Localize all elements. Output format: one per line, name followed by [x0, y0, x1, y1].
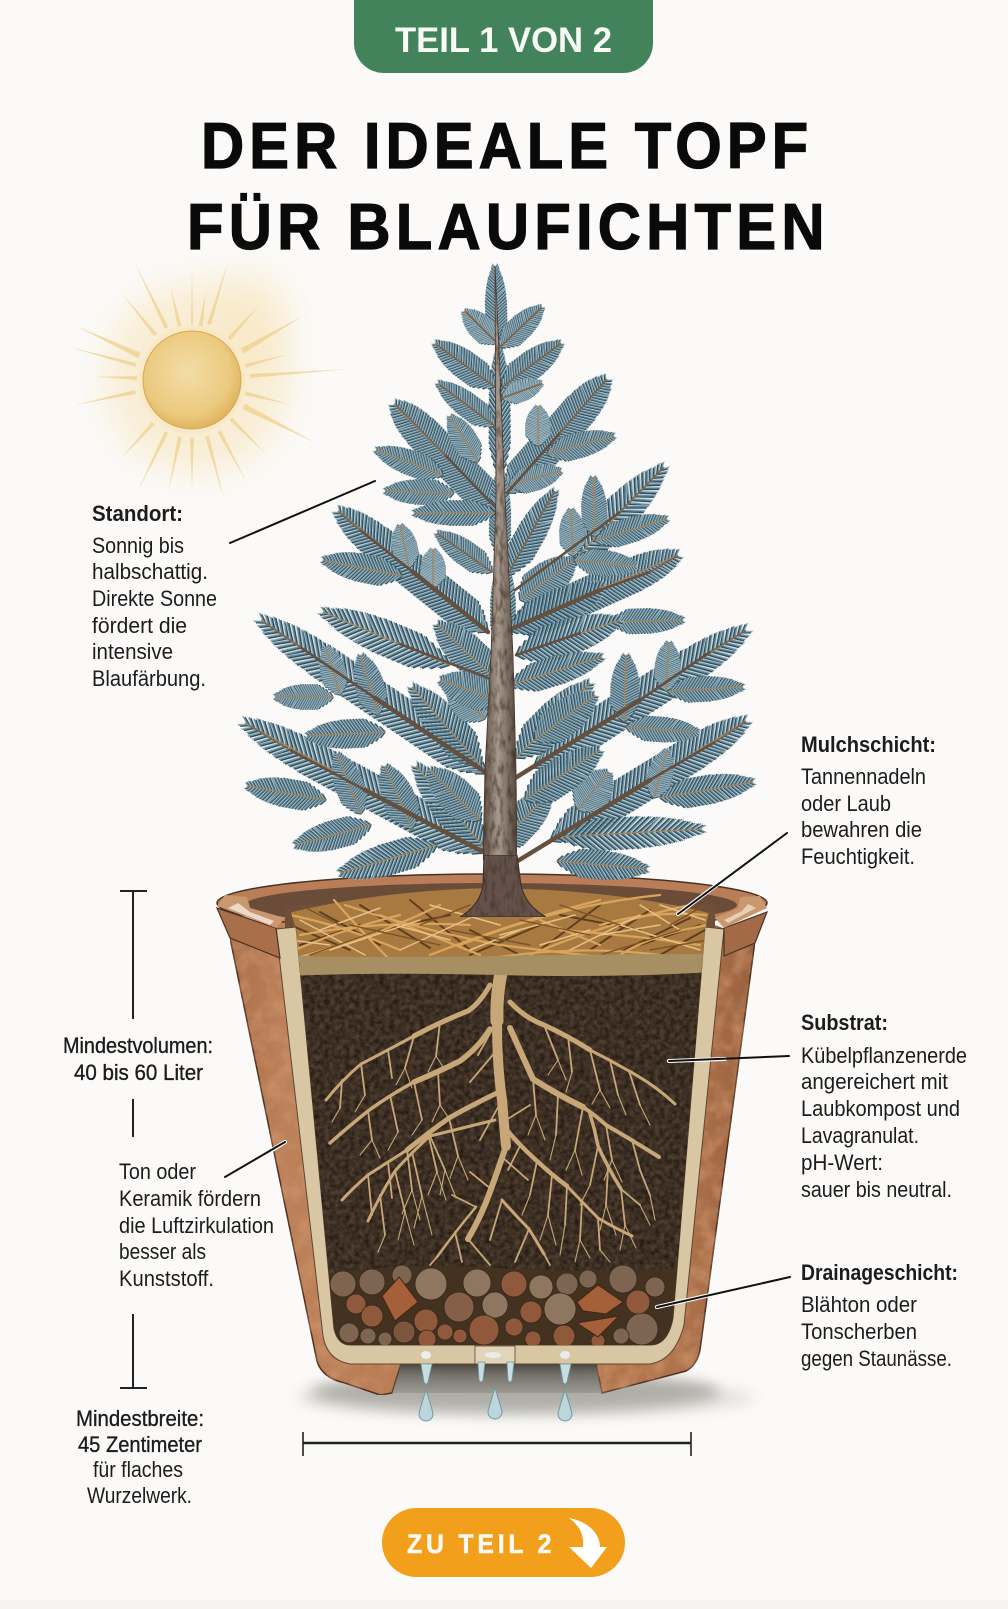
pot rim and inner opening: [217, 874, 767, 935]
header tab: part 1 of 2: [354, 0, 653, 73]
text: Mulchschicht: Feuchtigkeit.: [801, 844, 915, 869]
button: to part 2: [382, 1508, 625, 1577]
text: Mulchschicht: bewahren die: [801, 817, 922, 842]
text: Mulchschicht: Mulchschicht:: [801, 732, 936, 757]
text: Drainageschicht: Tonscherben: [801, 1319, 917, 1344]
text: Drainageschicht: Blähton oder: [801, 1292, 917, 1317]
text: Standort: Direkte Sonne: [92, 586, 217, 611]
big branches: [231, 364, 761, 869]
text: Mindestbreite: Wurzelwerk.: [87, 1483, 192, 1508]
volume height bracket: [120, 891, 147, 1388]
text: pot material: Ton oder: [119, 1159, 196, 1184]
text: pot material: Keramik fördern: [119, 1186, 261, 1211]
width bracket: [303, 1432, 691, 1456]
text: pot material: die Luftzirkulation: [119, 1213, 274, 1238]
title: [187, 110, 825, 264]
text: Substrat: Lavagranulat.: [801, 1123, 919, 1148]
text: Mulchschicht: Tannennadeln: [801, 764, 926, 789]
left rim cut face: [217, 895, 285, 958]
soil and layers, clipped to interior: [284, 888, 713, 1350]
text: Substrat: Kübelpflanzenerde: [801, 1043, 967, 1068]
cream wall section: [276, 927, 724, 1364]
text: Standort: Sonnig bis: [92, 533, 184, 558]
title: FÜR BLAUFICHTEN: [187, 191, 825, 264]
sandy transition band: [288, 954, 712, 976]
text: Mindestvolumen: 40 bis 60 Liter: [74, 1060, 203, 1085]
branch wood: [250, 308, 745, 862]
icon: sun: [71, 262, 347, 498]
text: pot material: besser als: [119, 1239, 206, 1264]
trunk: [483, 266, 517, 860]
text: Substrat: Substrat:: [801, 1010, 888, 1035]
text: Mulchschicht: [801, 732, 936, 869]
text: Drainageschicht: [801, 1260, 958, 1371]
text: Substrat: Laubkompost und: [801, 1096, 960, 1121]
text: pot material: [119, 1159, 274, 1291]
text: Standort: fördert die: [92, 613, 187, 638]
text: Standort: [92, 501, 217, 691]
text: Substrat: angereichert mit: [801, 1069, 948, 1094]
panel: blue spruce tree: [231, 263, 761, 917]
pot outer body: [230, 880, 755, 1395]
text: Drainageschicht: Drainageschicht:: [801, 1260, 958, 1285]
text: Mulchschicht: oder Laub: [801, 791, 891, 816]
substrate soil: [290, 960, 710, 1280]
text: Standort: Standort:: [92, 501, 183, 526]
text: Substrat: pH-Wert:: [801, 1150, 883, 1175]
straw needles: [290, 895, 708, 957]
text: Standort: intensive: [92, 639, 173, 664]
text: Substrat: [801, 1010, 967, 1202]
button: to part 2: ZU TEIL 2: [407, 1530, 551, 1559]
text: Mindestvolumen: [63, 1033, 213, 1085]
falling water drops: [419, 1388, 572, 1421]
panel: pot cross-section: [217, 874, 767, 1395]
text: Mindestbreite: Mindestbreite:: [76, 1406, 204, 1431]
ground shadow under pot: [295, 1372, 755, 1416]
header tab: part 1 of 2: TEIL 1 VON 2: [395, 21, 612, 60]
callout lines: [225, 481, 790, 1307]
text: Drainageschicht: gegen Staunässe.: [801, 1346, 952, 1371]
drainage layer: [320, 1265, 680, 1350]
text: pot material: Kunststoff.: [119, 1266, 214, 1291]
text: Mindestbreite: 45 Zentimeter: [78, 1432, 202, 1457]
text: Standort: halbschattig.: [92, 559, 208, 584]
drain holes and hanging drips: [421, 1346, 571, 1384]
text: Mindestvolumen: Mindestvolumen:: [63, 1033, 213, 1058]
icon: curved arrow: [569, 1518, 607, 1568]
title: DER IDEALE TOPF: [201, 110, 808, 183]
text: Mindestbreite: [76, 1406, 204, 1508]
text: Mindestbreite: für flaches: [93, 1457, 183, 1482]
side fronds: [242, 263, 759, 889]
space under pot floor: [392, 1364, 602, 1393]
trunk base flare: [460, 855, 546, 917]
text: Substrat: sauer bis neutral.: [801, 1177, 952, 1202]
roots: [326, 968, 675, 1265]
mulch layer: [284, 888, 713, 960]
right rim cut face: [715, 896, 767, 956]
text: Standort: Blaufärbung.: [92, 666, 206, 691]
